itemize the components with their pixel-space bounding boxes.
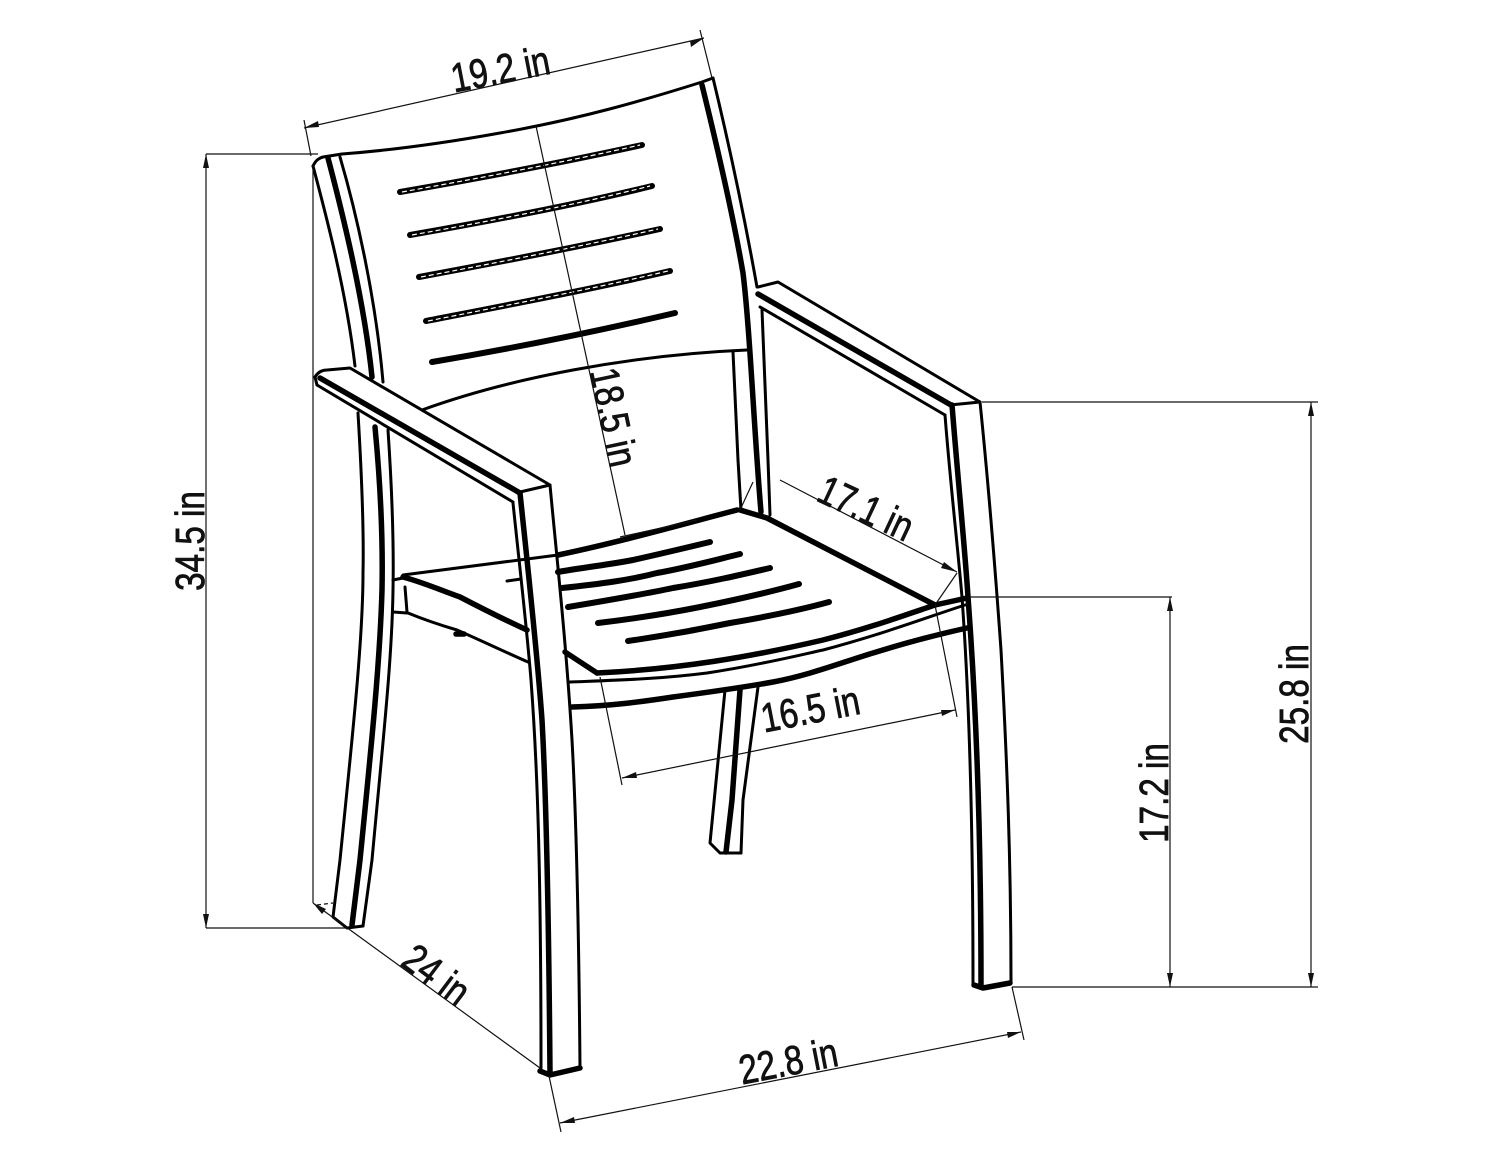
- label: 22.8 in: 22.8 in: [735, 1029, 842, 1093]
- chair back rest: [313, 78, 770, 515]
- front right leg: [945, 402, 1011, 988]
- label: 34.5 in: 34.5 in: [167, 491, 213, 591]
- label: 25.8 in: 25.8 in: [1271, 644, 1317, 744]
- right back leg: [710, 687, 758, 853]
- label: 17.1 in: 17.1 in: [811, 466, 921, 550]
- left back leg: [333, 413, 393, 928]
- dimension arrowheads: [203, 38, 1314, 1123]
- label: 16.5 in: 16.5 in: [757, 677, 864, 741]
- label: 18.5 in: 18.5 in: [581, 363, 647, 471]
- label: 17.2 in: 17.2 in: [1131, 743, 1177, 843]
- seat slats: [558, 542, 829, 641]
- label: 24 in: 24 in: [394, 934, 479, 1015]
- back slats: [400, 145, 675, 362]
- dimension lines: [206, 30, 1318, 1132]
- front left leg: [513, 485, 580, 1075]
- label: 19.2 in: 19.2 in: [447, 37, 554, 101]
- left armrest: [315, 368, 550, 502]
- right armrest: [758, 282, 980, 415]
- seat: [393, 510, 967, 707]
